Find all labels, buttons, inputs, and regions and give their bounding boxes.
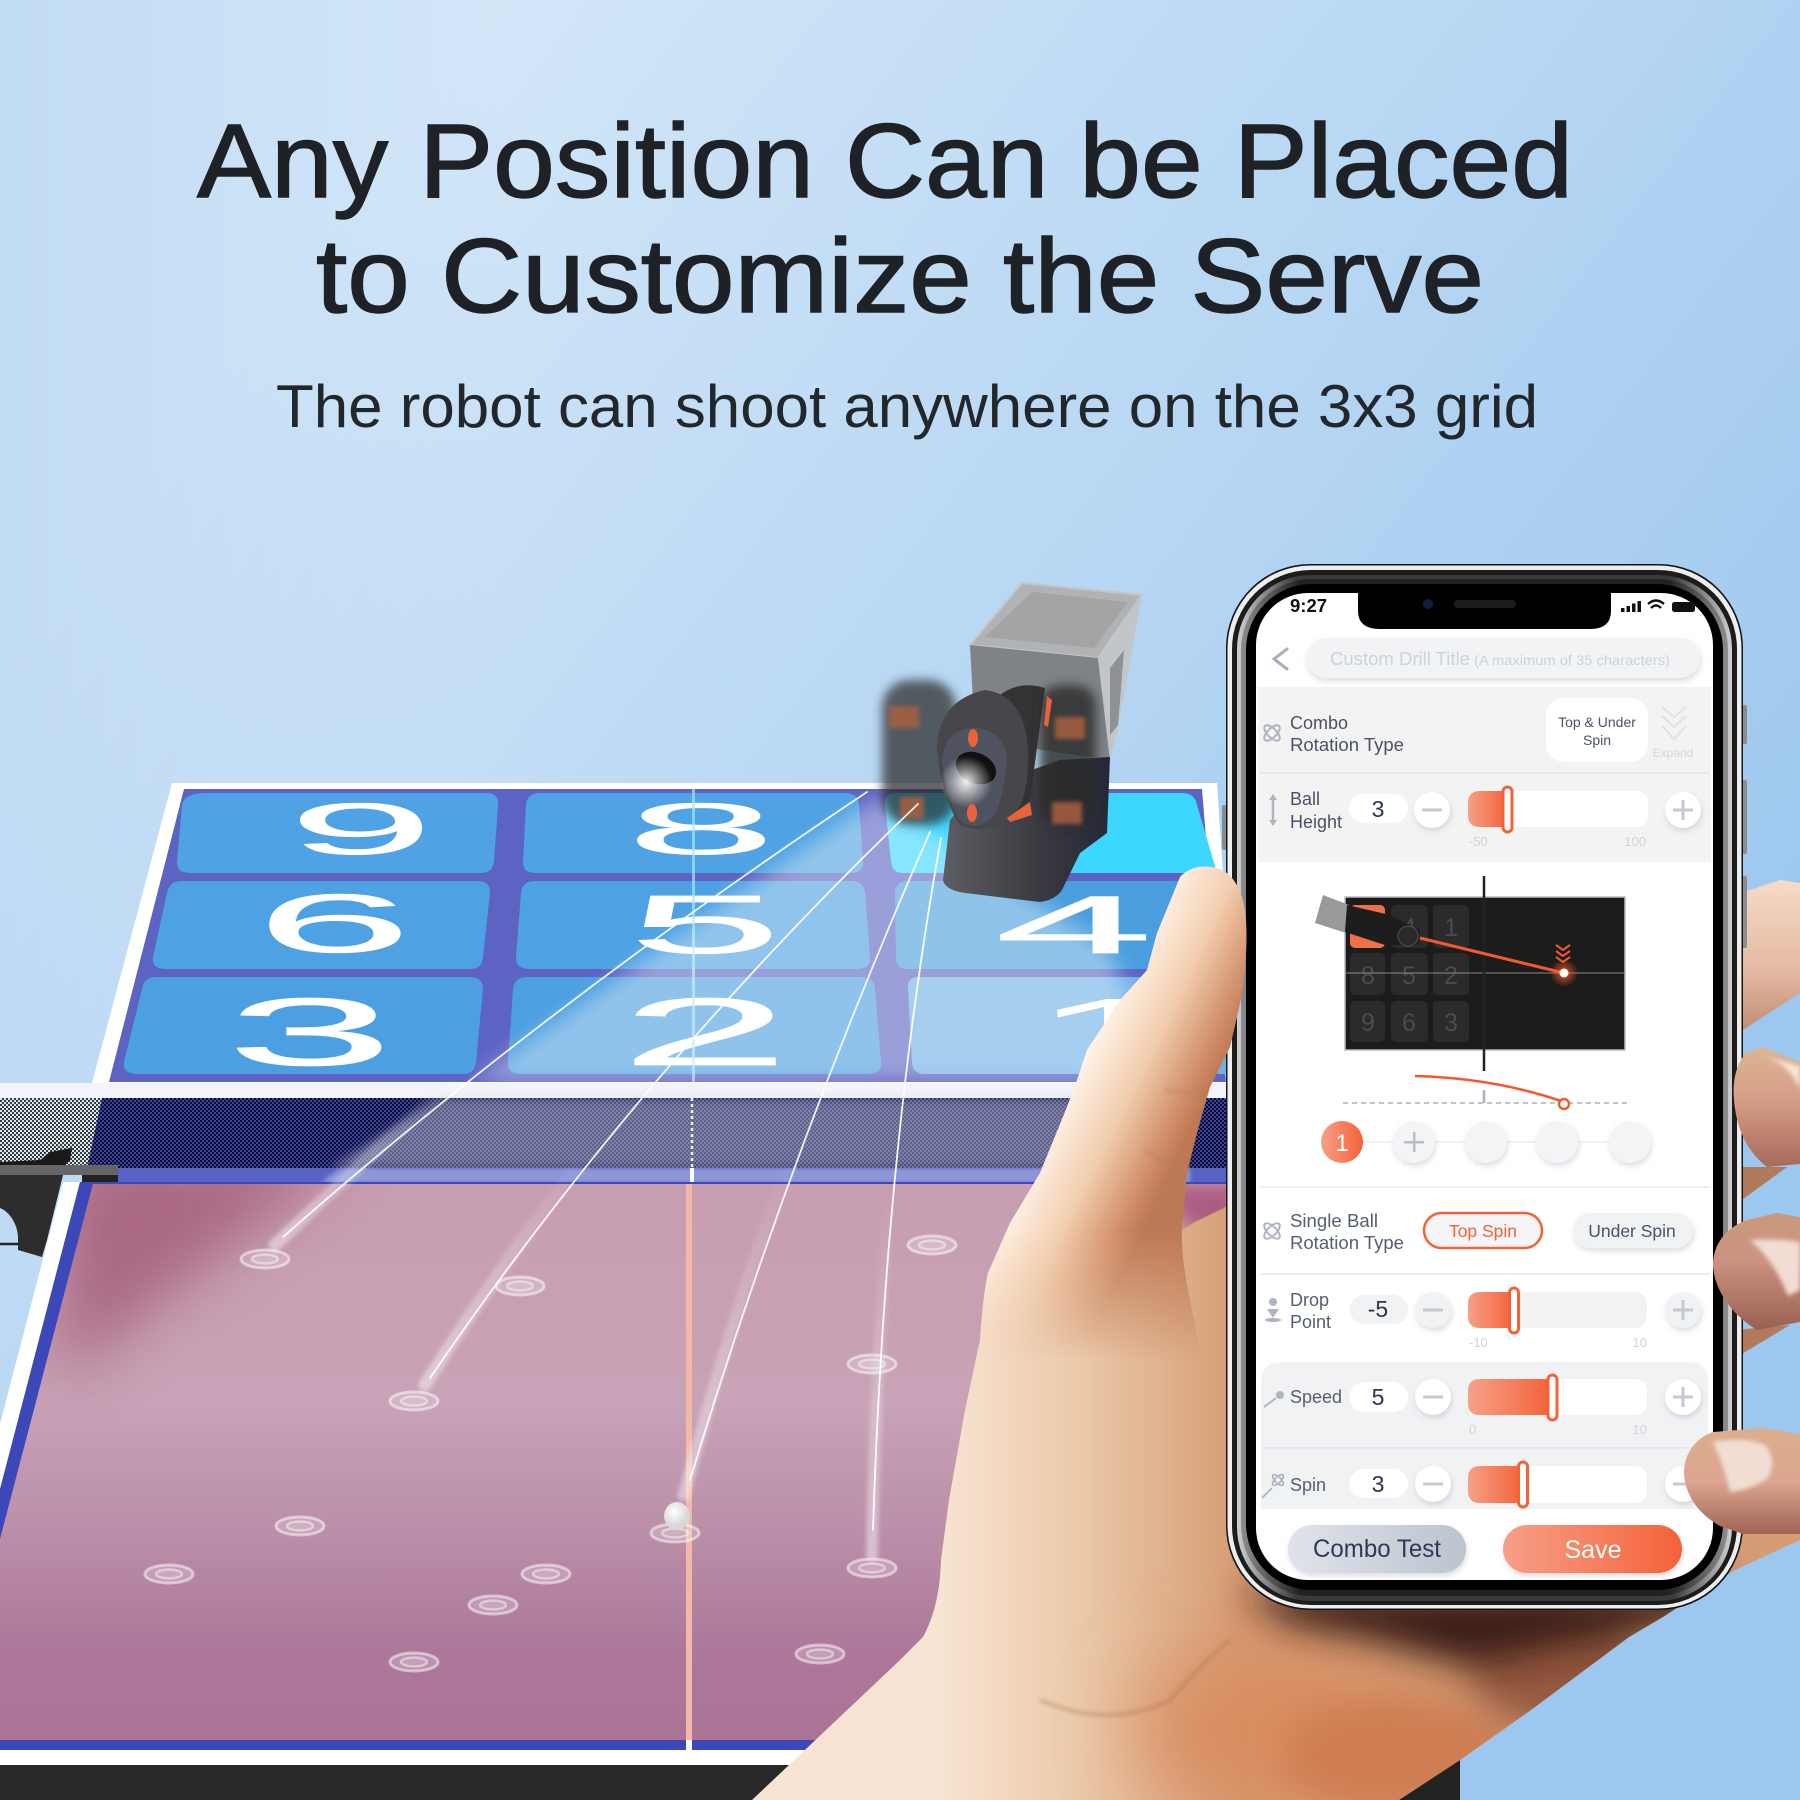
target grid: 1 (1444, 914, 1458, 942)
drill title field: (A maximum of 35 characters) (1474, 652, 1670, 668)
drop marker (1550, 959, 1578, 987)
combo icon (1262, 723, 1282, 743)
mini robot (1315, 895, 1420, 946)
ball trajectories (275, 792, 941, 1555)
drill title field: Custom Drill Title (1330, 648, 1470, 669)
save button (1503, 1525, 1682, 1573)
combo test button: Combo Test (1313, 1535, 1441, 1563)
target grid: 8 (1361, 962, 1375, 990)
grid cell 6 (153, 877, 490, 970)
grid cell 7 (885, 793, 1217, 873)
phone frame (1226, 564, 1743, 1610)
drop point row: -10 (1469, 1335, 1488, 1350)
combo label: Rotation Type (1290, 735, 1404, 755)
ball height scale (1469, 834, 1646, 849)
grid cell 3: 3 (227, 978, 393, 1086)
notch (1358, 593, 1611, 629)
combo label: Combo (1290, 713, 1348, 733)
top spin button: Top Spin (1449, 1221, 1517, 1241)
target grid: 6 (1402, 1009, 1416, 1037)
trajectory 4 (872, 838, 941, 1555)
step 1 (1321, 1121, 1363, 1163)
spin row: 3 (1372, 1471, 1384, 1497)
grid cell 5: 5 (629, 878, 781, 971)
empty steps (1465, 1121, 1651, 1163)
table leg (1396, 1760, 1460, 1800)
net clamp and post (0, 1148, 118, 1257)
single ball rotation row (1262, 1211, 1693, 1253)
hand: third finger (1713, 1213, 1800, 1330)
drill title field (1306, 638, 1700, 678)
screen (1256, 593, 1713, 1580)
single ball rotation row: Single Ball (1290, 1211, 1378, 1231)
robot head (937, 690, 1052, 829)
spin row (1261, 1449, 1708, 1509)
step 1: 1 (1335, 1130, 1349, 1157)
hand: upper finger behind phone (1735, 880, 1800, 1035)
table: near side (0, 1150, 1240, 1800)
right blurred wheel (1000, 685, 1096, 825)
grid cell 5 (516, 878, 870, 971)
spin row: Spin (1290, 1475, 1326, 1495)
hand: second finger (1734, 1047, 1800, 1167)
grid cell 4 (895, 879, 1218, 971)
top and under spin card: Spin (1583, 732, 1611, 748)
title: Any Position Can be Placed (197, 103, 1573, 220)
hand: index finger (1684, 1428, 1800, 1534)
combo label (1290, 713, 1404, 755)
target grid: 4 (1402, 914, 1416, 942)
ball height value: 3 (1372, 796, 1384, 822)
target grid: 2 (1444, 962, 1458, 990)
speed row: 10 (1633, 1422, 1647, 1437)
shot line (1420, 938, 1564, 973)
grid cell 2 (508, 977, 881, 1085)
trajectory 2 (425, 804, 918, 1385)
expand chevrons (1662, 707, 1686, 739)
expand label: Expand (1653, 746, 1693, 760)
grid cell 1 (908, 977, 1226, 1074)
back arrow (1274, 649, 1287, 669)
ball height icon (1269, 794, 1277, 826)
grid cell 8: 8 (626, 788, 776, 870)
status bar (1290, 595, 1695, 616)
net (0, 1098, 1240, 1184)
trajectory 1 (275, 792, 867, 1245)
ball height slider (1468, 787, 1648, 832)
target grid: 9 (1361, 1009, 1375, 1037)
ball height label: Ball (1290, 789, 1320, 809)
top spin button (1424, 1213, 1542, 1248)
hand: thumb (983, 866, 1246, 1348)
drop point top view (1315, 876, 1625, 1071)
smartphone (1222, 564, 1747, 1610)
grid cell 9: 9 (289, 788, 433, 870)
combo and ball height section (1258, 687, 1711, 862)
combo test button (1288, 1525, 1466, 1573)
target grid: 3 (1444, 1009, 1458, 1037)
combo step selector (1321, 1121, 1651, 1163)
signal (1621, 601, 1641, 612)
drop point side view (1343, 1076, 1627, 1109)
drop point row: Point (1290, 1312, 1331, 1332)
battery (1672, 602, 1695, 612)
add step (1393, 1121, 1435, 1163)
grid cell 9 (177, 788, 498, 873)
top and under spin card: Top & Under (1558, 714, 1636, 730)
top and under spin card (1546, 698, 1648, 762)
target grid: 5 (1402, 962, 1416, 990)
under spin button: Under Spin (1588, 1221, 1676, 1241)
ball height scale: -50 (1469, 834, 1488, 849)
drop chevrons (1556, 945, 1570, 962)
finger shadows behind phone (1735, 1167, 1790, 1358)
grid cell 1: 1 (1029, 978, 1195, 1086)
table: far side with numbered 3x3 grid (0, 783, 1238, 1098)
title (197, 103, 1573, 335)
ball height label: Height (1290, 812, 1342, 832)
drop point row (1265, 1288, 1701, 1350)
ball height value (1349, 794, 1408, 823)
base (943, 757, 1110, 902)
target grid (1350, 905, 1469, 1042)
single ball rotation row: Rotation Type (1290, 1233, 1404, 1253)
drop point row: -5 (1368, 1296, 1388, 1322)
ball height scale: 100 (1624, 834, 1646, 849)
ball height label (1290, 789, 1342, 832)
left blurred wheel (882, 680, 956, 825)
subtitle: The robot can shoot anywhere on the 3x3 grid (276, 373, 1538, 440)
drop point row: 10 (1633, 1335, 1647, 1350)
status bar: 9:27 (1290, 595, 1327, 616)
speed row (1261, 1362, 1708, 1448)
save button: Save (1565, 1536, 1621, 1564)
drop point row: Drop (1290, 1290, 1329, 1310)
minus button (1414, 792, 1450, 828)
grid cell 6: 6 (256, 877, 412, 970)
landing rings (145, 1236, 956, 1671)
speed row: 0 (1469, 1422, 1476, 1437)
grid cell 8 (523, 788, 863, 873)
hand: palm (752, 1107, 1800, 1800)
wifi (1648, 600, 1664, 608)
speed row: Speed (1290, 1387, 1342, 1407)
grid cell 4: 4 (995, 879, 1153, 971)
trajectory 3 (684, 832, 930, 1495)
ball robot (882, 583, 1142, 902)
grid cell 2: 2 (620, 978, 790, 1085)
plus button (1665, 792, 1701, 828)
title: to Customize the Serve (316, 218, 1484, 335)
grid cell 3 (124, 977, 483, 1086)
ball (664, 1502, 690, 1530)
phone buttons (1222, 705, 1747, 948)
hopper (970, 583, 1142, 760)
speed row: 5 (1372, 1384, 1384, 1410)
under spin button (1573, 1213, 1693, 1248)
light fan on grid (470, 795, 1160, 1082)
